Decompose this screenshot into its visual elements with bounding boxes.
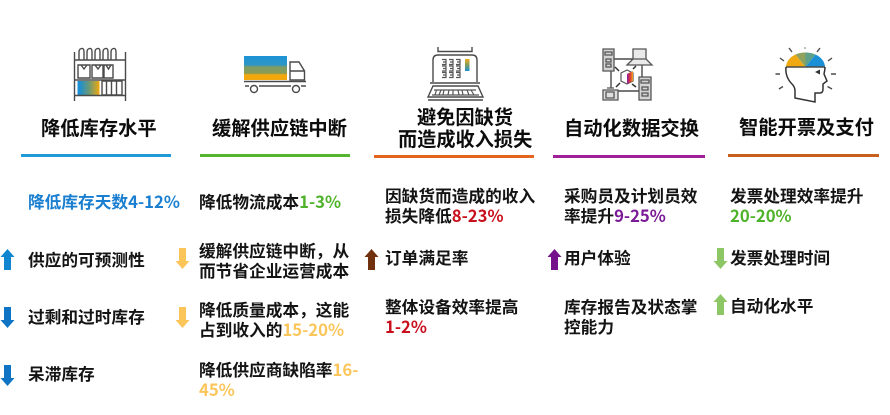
metric: operating cost savings: [199, 238, 349, 282]
metric: operating cost savings: 而节省企业运营成本: [199, 258, 349, 282]
heading: lost revenue: 而造成收入损失: [398, 124, 532, 152]
metric: automation level: 自动化水平: [730, 293, 813, 317]
key figure: 20-20%: [730, 203, 792, 227]
metric: inventory reporting: [564, 294, 698, 338]
key figure: [730, 183, 864, 227]
icon: brown up arrow: [364, 249, 378, 270]
metric: quality cost: [199, 297, 349, 341]
icon: down arrow: [0, 365, 14, 386]
metric: equipment efficiency: [385, 294, 518, 338]
metric: inventory reporting: 控能力: [564, 314, 614, 338]
heading rule: [728, 154, 879, 157]
key figure: 降低库存天数4-12%: [28, 189, 180, 213]
key figure: 损失降低8-23%: [385, 203, 504, 227]
icon: cash register: [427, 47, 484, 101]
heading: data exchange: 自动化数据交换: [564, 113, 699, 141]
icon: head with idea dome: [776, 48, 836, 103]
key figure: 降低物流成本1-3%: [199, 189, 341, 213]
metric: supply predictability: 供应的可预测性: [28, 247, 145, 271]
icon: down arrow: [0, 307, 14, 328]
metric: invoice time: 发票处理时间: [730, 245, 830, 269]
icon: purple up arrow: [548, 249, 562, 270]
panel: smart invoicing and payment: [714, 48, 879, 317]
heading rule: [200, 154, 350, 157]
icon: truck: [244, 56, 306, 94]
key figure: [385, 183, 535, 227]
panel: mitigate supply chain disruption: [176, 56, 358, 401]
metric: supplier defects: [199, 357, 358, 401]
icon: yellow down arrow: [176, 248, 190, 269]
icon: up arrow: [0, 249, 14, 270]
metric: inventory reporting: 库存报告及状态掌: [564, 294, 698, 318]
panel: automated data exchange: [548, 48, 705, 338]
icon: connected devices: [602, 48, 654, 101]
key figure: 因缺货而造成的收入: [385, 183, 535, 207]
icon: green down arrow: [714, 248, 728, 269]
metric: quality cost: 占到收入的15-20%: [199, 317, 344, 341]
key figure: 率提升9-25%: [564, 203, 666, 227]
key figure: 发票处理效率提升: [730, 183, 864, 207]
metric: order fill rate: 订单满足率: [385, 245, 468, 269]
icon: green up arrow: [714, 294, 728, 315]
metric: equipment efficiency: 1-2%: [385, 314, 427, 338]
metric: equipment efficiency: 整体设备效率提高: [385, 294, 518, 318]
metric: quality cost: 降低质量成本，这能: [199, 297, 349, 321]
heading: mitigate disruption: 缓解供应链中断: [212, 113, 347, 141]
metric: excess inventory: 过剩和过时库存: [28, 304, 145, 328]
heading rule: [374, 155, 534, 158]
heading rule: [21, 154, 171, 157]
icon: warehouse shelf: [74, 48, 126, 101]
key figure: 采购员及计划员效: [564, 183, 698, 207]
panel: reduce inventory: [0, 48, 180, 386]
metric: stagnant inventory: 呆滞库存: [28, 361, 95, 385]
metric: supplier defects: 降低供应商缺陷率16-: [199, 357, 358, 381]
metric: user experience: 用户体验: [564, 245, 631, 269]
heading: smart invoicing: 智能开票及支付: [739, 112, 874, 140]
panel: avoid lost revenue: [364, 47, 535, 338]
heading: avoid stockouts: 避免因缺货: [417, 102, 513, 130]
metric: supplier defects: 45%: [199, 377, 235, 401]
key figure: [564, 183, 698, 227]
heading: reduce inventory: 降低库存水平: [41, 113, 157, 141]
metric: operating cost savings: 缓解供应链中断，从: [199, 238, 349, 262]
icon: yellow down arrow: [176, 307, 190, 328]
heading rule: [553, 155, 705, 158]
